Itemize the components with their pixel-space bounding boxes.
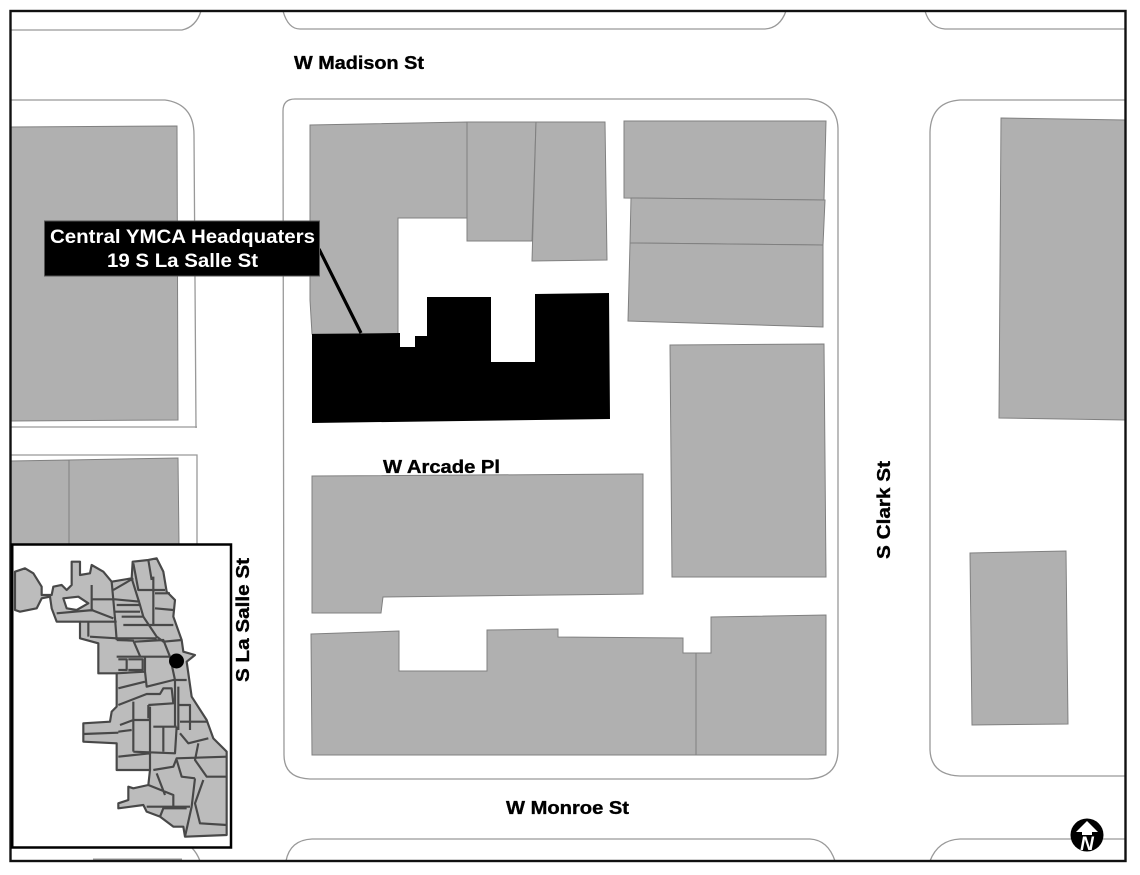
callout label: Central YMCA Headquaters: [50, 226, 315, 248]
callout label: [44, 221, 320, 276]
building: southwest block: [11, 460, 69, 545]
street label: S La Salle St: S La Salle St: [233, 558, 253, 682]
building: east central block: [670, 344, 826, 577]
location dot: [169, 654, 184, 668]
building: northeast block bottom: [628, 243, 823, 327]
building: far east small: [970, 551, 1068, 725]
street label: S Clark St: S Clark St: [874, 461, 894, 559]
callout label: 19 S La Salle St: [107, 250, 259, 272]
leader line: [319, 249, 361, 333]
building: northeast block top: [624, 121, 826, 200]
building: bottom edge sliver: [93, 858, 182, 860]
north arrow: [1070, 818, 1104, 855]
inset map: [11, 544, 231, 848]
street label: W Arcade Pl: W Arcade Pl: [383, 457, 500, 477]
inset panel: [12, 544, 231, 848]
building: north middle: [467, 122, 536, 241]
building: Arcade Pl block: [312, 474, 643, 613]
building: west block: [11, 126, 178, 421]
building: south block east: [696, 615, 826, 755]
building: northeast block middle: [630, 198, 825, 245]
Chicago community areas: [15, 558, 227, 837]
highlighted building: Central YMCA: [312, 293, 610, 423]
street label: W Madison St: W Madison St: [294, 53, 424, 73]
street label: W Monroe St: W Monroe St: [506, 798, 629, 818]
building: far east tower: [999, 118, 1125, 420]
north arrow: N: [1080, 834, 1095, 855]
building: north east of middle: [532, 122, 607, 261]
building: south block west: [311, 629, 696, 755]
building: southwest block east: [69, 458, 179, 545]
building: YMCA north wing: [310, 122, 467, 334]
